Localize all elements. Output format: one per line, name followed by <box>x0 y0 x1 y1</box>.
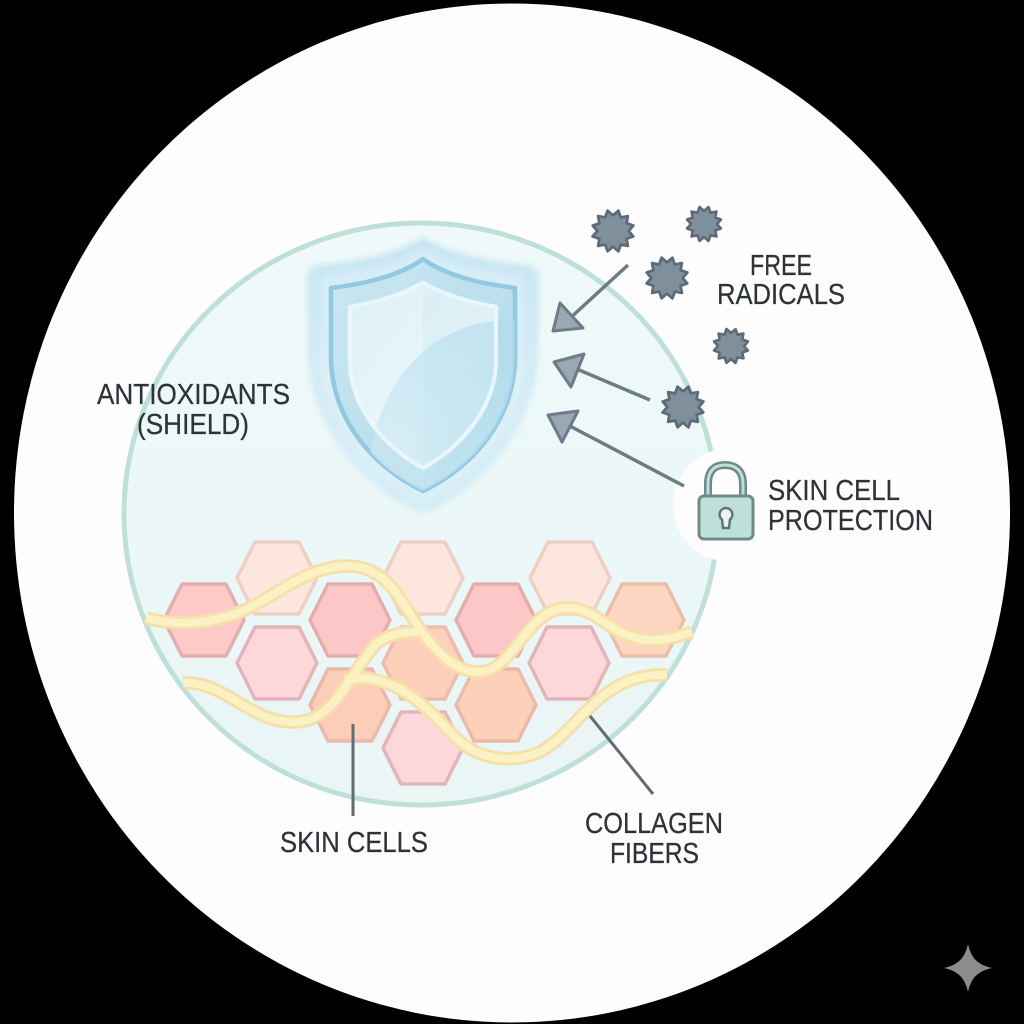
label: free radicals: FREE <box>750 250 812 282</box>
icon: sparkle watermark <box>944 944 992 992</box>
label: skin cell protection <box>768 475 933 537</box>
label: skin cell protection: SKIN CELL <box>768 475 900 507</box>
label: collagen fibers: FIBERS <box>610 838 699 870</box>
label: skin cells: SKIN CELLS <box>280 827 428 859</box>
icon: padlock <box>699 465 753 539</box>
label: antioxidants shield: (SHIELD) <box>137 409 249 441</box>
arrow: free radical attack 3 <box>548 411 684 486</box>
panel: skin cross-section circle <box>124 223 718 805</box>
leader line: skin cells <box>352 724 354 816</box>
label: collagen fibers <box>585 808 723 870</box>
icon: antioxidant shield <box>307 237 539 515</box>
label: skin cell protection: PROTECTION <box>768 505 933 537</box>
white badge behind lock <box>673 448 787 562</box>
label: free radicals: RADICALS <box>717 279 845 311</box>
label: free radicals <box>717 250 845 311</box>
leader line: collagen fibers <box>590 716 653 794</box>
skin cells: hexagon cluster <box>164 542 684 784</box>
arrow: free radical attack 2 <box>554 354 650 400</box>
label: antioxidants shield: ANTIOXIDANTS <box>97 379 290 411</box>
arrow: free radical attack 1 <box>553 265 628 331</box>
collagen fibers <box>146 566 692 759</box>
label: collagen fibers: COLLAGEN <box>585 808 723 840</box>
free radical particles <box>587 203 752 433</box>
label: antioxidants shield <box>97 379 290 441</box>
